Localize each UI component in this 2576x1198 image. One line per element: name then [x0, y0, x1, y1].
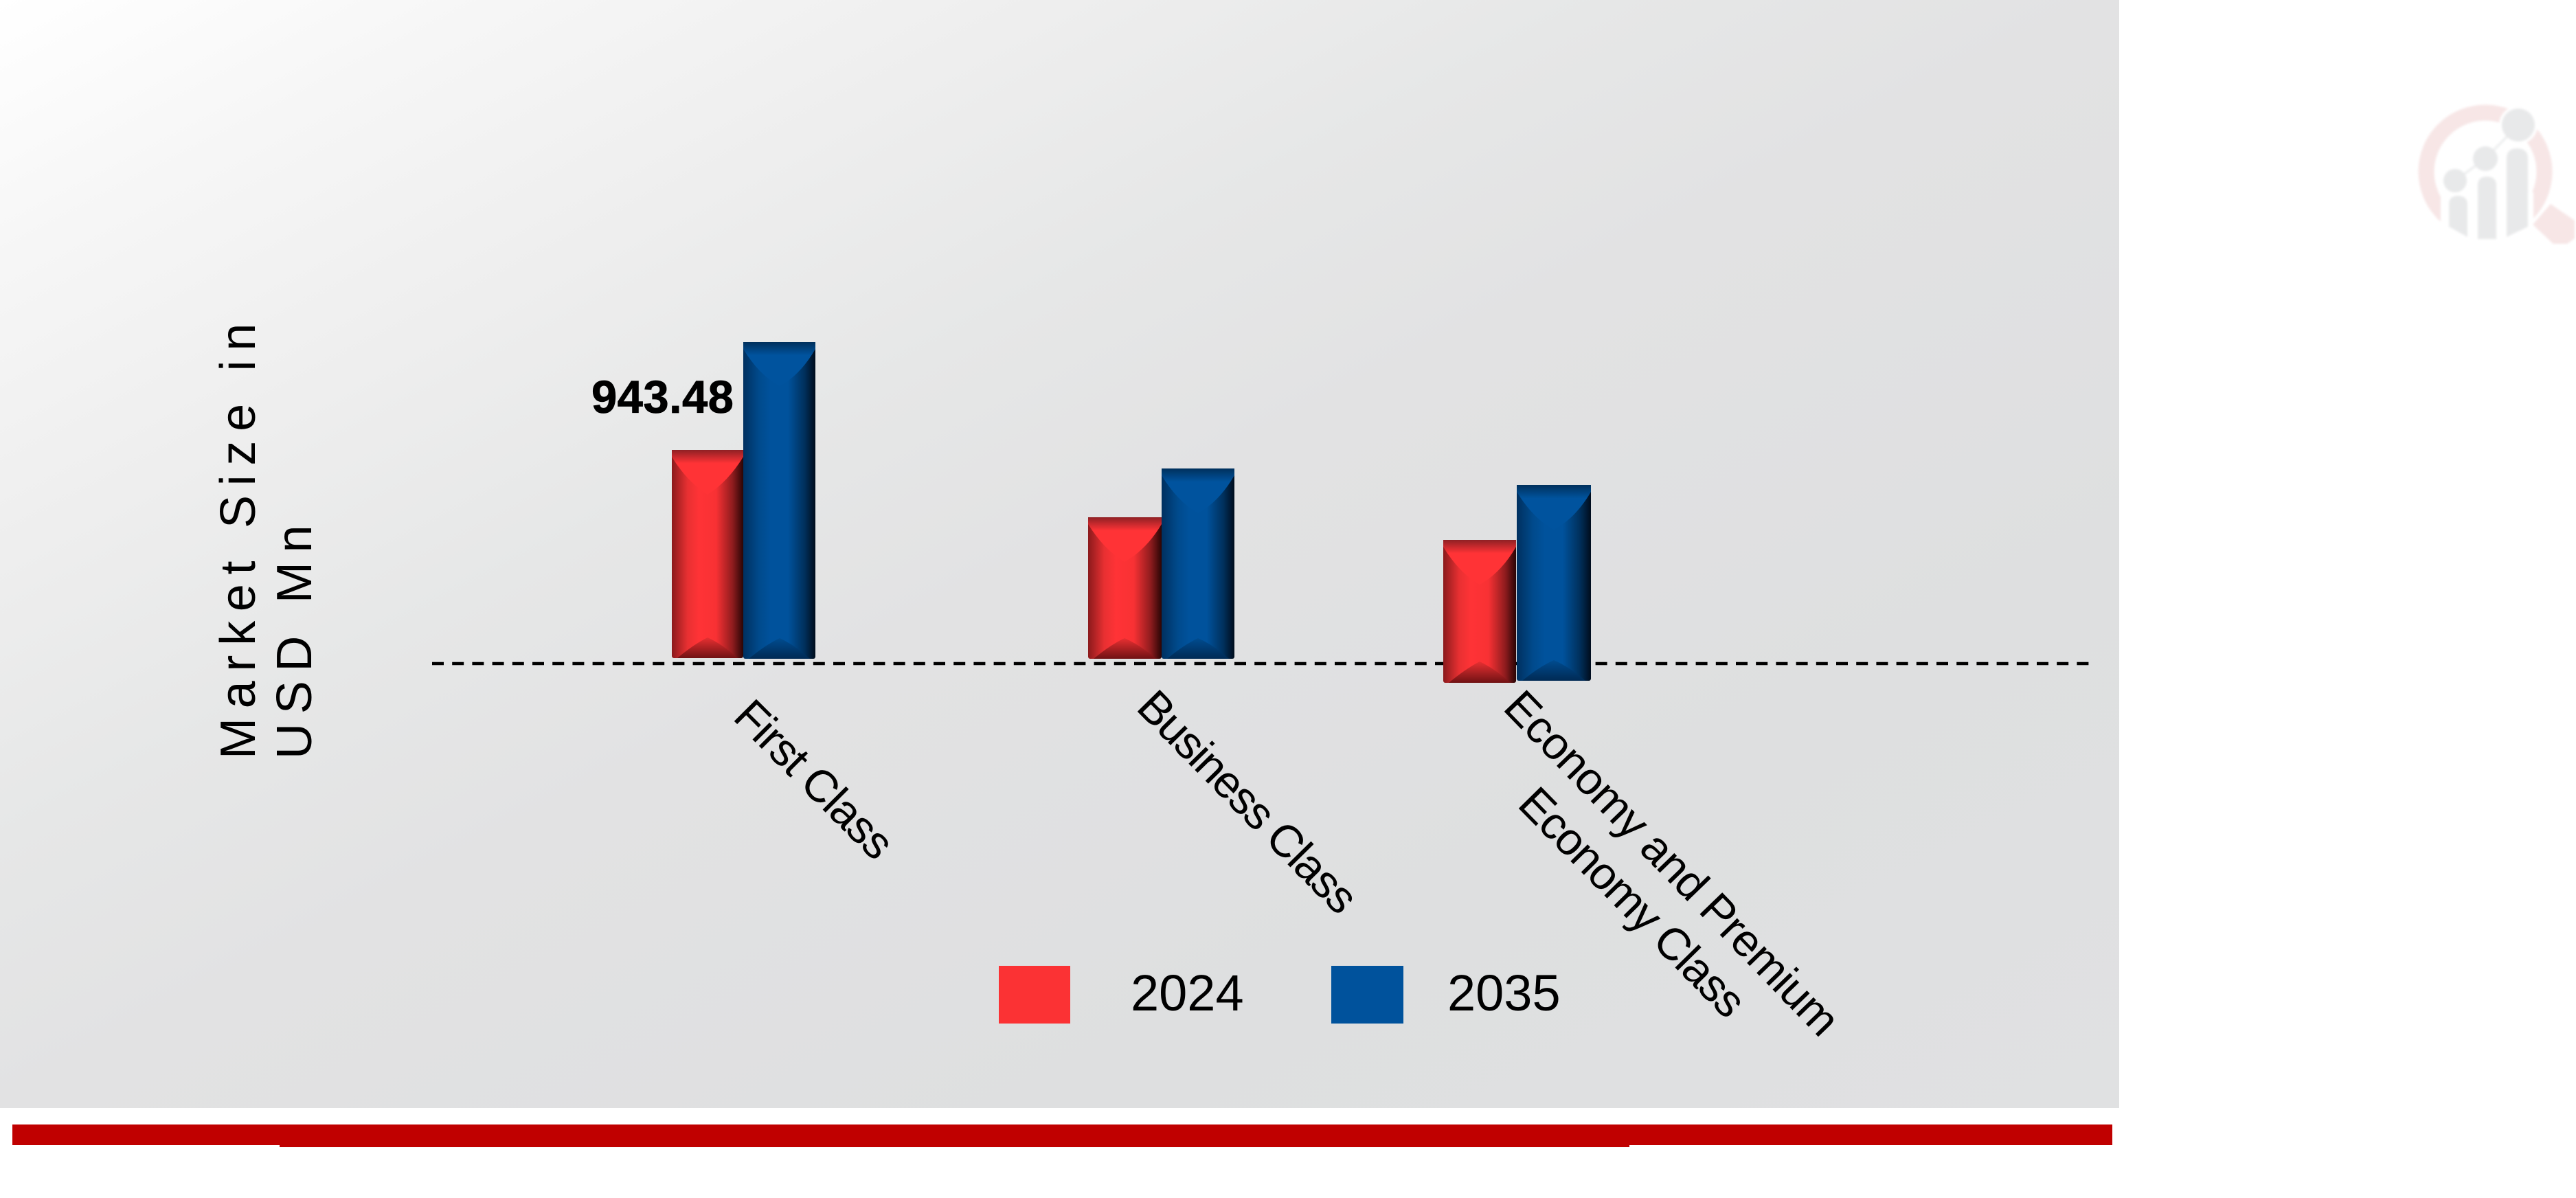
- icon: watermark logo: [2426, 106, 2575, 244]
- bar: First Class 2035: [743, 342, 815, 659]
- legend swatch: 2035: [1331, 966, 1403, 1024]
- legend swatch: 2024: [999, 966, 1070, 1024]
- bar: Business Class 2024: [1088, 517, 1162, 659]
- y axis title: [211, 314, 322, 759]
- data label: 943.48: 943.48: [591, 372, 734, 423]
- bar group: First Class: [591, 342, 815, 659]
- bar: Economy 2035: [1517, 485, 1591, 681]
- y axis title: Market Size in: [211, 314, 266, 759]
- category label: Economy and Premium Economy Class: Economy and Premium: [1495, 680, 1849, 1045]
- baseline: dashed zero line: [432, 662, 2090, 665]
- category label: Business Class: Business Class: [1128, 680, 1367, 923]
- bar: Business Class 2035: [1162, 468, 1234, 659]
- legend label: 2024: 2024: [1131, 964, 1244, 1021]
- category label: First Class: First Class: [725, 690, 903, 868]
- legend: [999, 964, 1561, 1024]
- bar: Economy 2024: [1443, 540, 1516, 683]
- category label: Economy and Premium Economy Class: Economy Class: [1509, 777, 1756, 1026]
- bar group: Business Class: [1088, 468, 1234, 659]
- y axis title: USD Mn: [267, 516, 322, 759]
- footer bar: [12, 1124, 2112, 1147]
- bar: First Class 2024: [672, 450, 743, 658]
- bar group: Economy: [1443, 485, 1591, 683]
- panel: chart background: [0, 0, 2119, 1108]
- legend label: 2035: 2035: [1447, 964, 1561, 1021]
